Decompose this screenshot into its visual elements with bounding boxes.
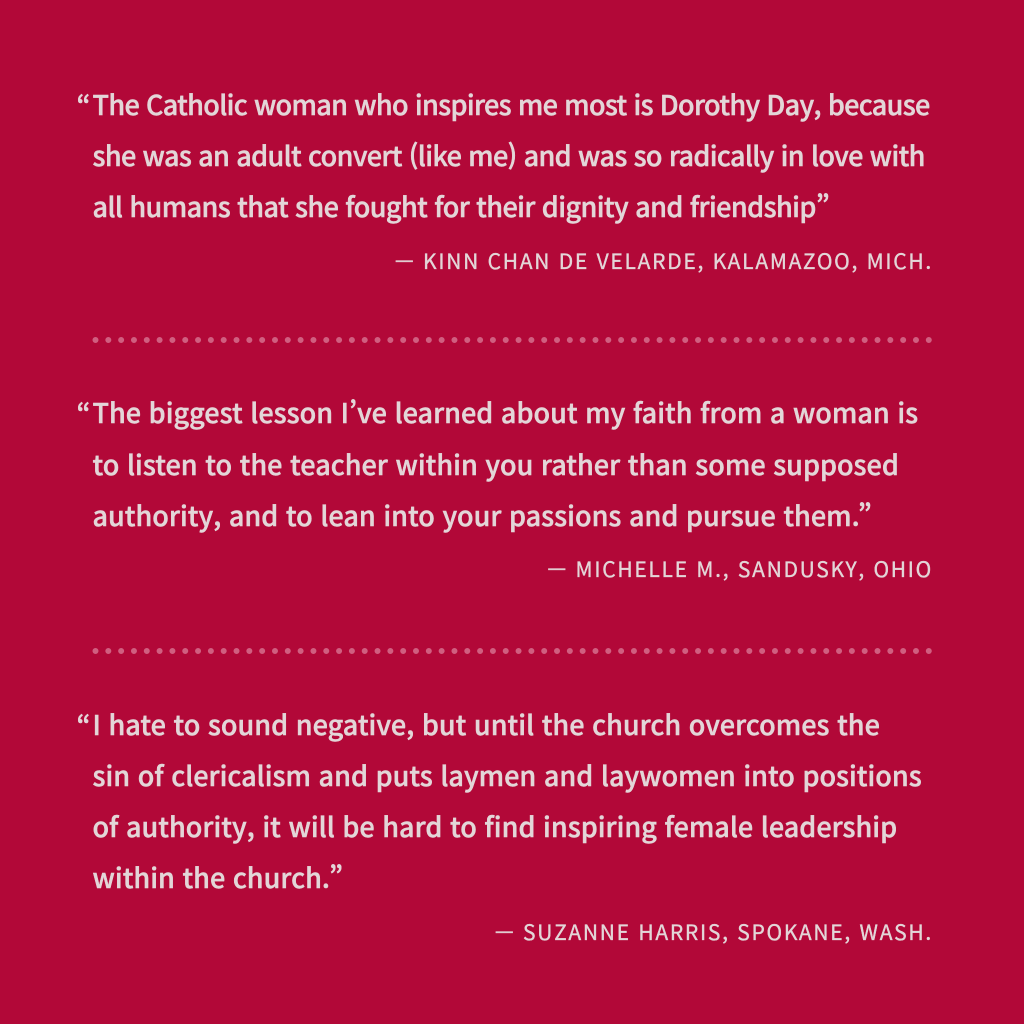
attribution 1: — KINN CHAN DE VELARDE, KALAMAZOO, MICH. bbox=[395, 246, 933, 276]
attribution 3: — SUZANNE HARRIS, SPOKANE, WASH. bbox=[495, 917, 933, 947]
quote block 1 bbox=[76, 84, 933, 276]
quote block 3 bbox=[76, 704, 933, 947]
quote 3 line 3: of authority, it will be hard to find inspiring female leadership bbox=[92, 806, 897, 845]
quote 3 line 2: sin of clericalism and puts laymen and laywomen into positions bbox=[92, 755, 922, 794]
quote 2 line 1: The biggest lesson I’ve learned about my faith from a woman is bbox=[92, 392, 918, 431]
quote 1 line 3: all humans that she fought for their dignity and friendship” bbox=[92, 186, 829, 225]
quote 1 line 2: she was an adult convert (like me) and was so radically in love with bbox=[92, 135, 925, 174]
quote 1 line 1: The Catholic woman who inspires me most is Dorothy Day, because bbox=[92, 84, 930, 123]
quote block 2: “ bbox=[76, 392, 91, 431]
dotted divider 1 bbox=[92, 337, 932, 343]
dotted divider 2 bbox=[92, 648, 932, 654]
quote 2 line 2: to listen to the teacher within you rather than some supposed bbox=[92, 444, 899, 483]
quote block 3: “ bbox=[76, 704, 91, 743]
attribution 2: — MICHELLE M., SANDUSKY, OHIO bbox=[547, 554, 933, 584]
quote block 2 bbox=[76, 392, 933, 584]
quote 3 line 4: within the church.” bbox=[92, 857, 343, 896]
quote 2 line 3: authority, and to lean into your passions and pursue them.” bbox=[92, 495, 872, 534]
quote 3 line 1: I hate to sound negative, but until the church overcomes the bbox=[92, 704, 880, 743]
quote block 1: “ bbox=[76, 84, 90, 123]
